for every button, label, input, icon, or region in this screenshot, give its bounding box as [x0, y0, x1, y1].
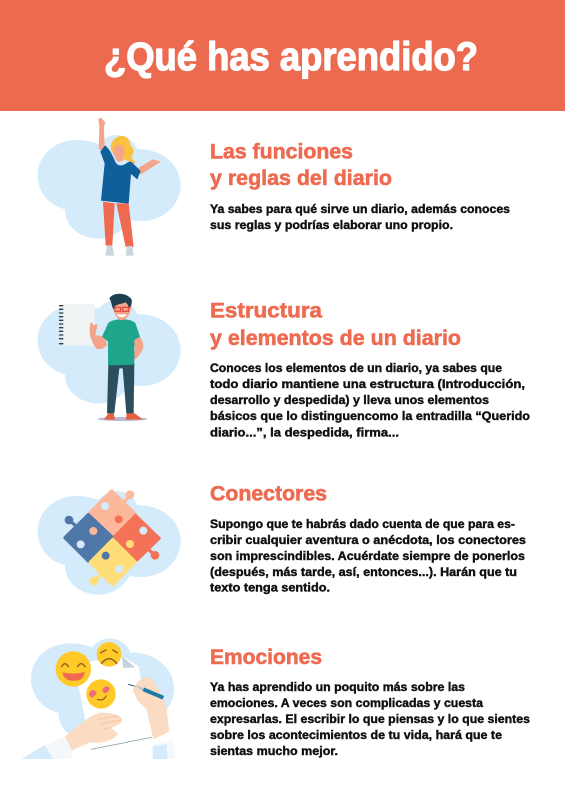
body text: son imprescindibles. Acuérdate siempre de ponerlos	[210, 549, 525, 563]
body text: todo diario mantiene una estructura (Introducción,	[210, 377, 525, 391]
body text: texto tenga sentido.	[210, 580, 330, 594]
body text: básicos que lo distinguencomo la entradilla “Querido	[210, 409, 530, 423]
body text: desarrollo y despedida) y lleva unos elementos	[210, 393, 489, 407]
title: ¿Qué has aprendido?	[104, 35, 478, 79]
body text: sobre los acontecimientos de tu vida, hará que te	[210, 728, 502, 742]
body text: cribir cualquier aventura o anécdota, los conectores	[210, 533, 526, 547]
body text: expresarlas. El escribir lo que piensas y lo que sientes	[210, 712, 530, 726]
illustration: woman waving on cloud	[38, 117, 181, 256]
illustration: hands writing with emojis on cloud	[22, 638, 176, 759]
panel: emociones	[22, 638, 530, 759]
body text: (después, más tarde, así, entonces...). Harán que tu	[210, 565, 517, 579]
body text: Conoces los elementos de un diario, ya sabes que	[210, 361, 502, 375]
body text: emociones. A veces son complicadas y cuesta	[210, 696, 483, 710]
heading: y reglas del diario	[210, 166, 392, 190]
body text	[210, 202, 510, 232]
illustration: puzzle on cloud	[38, 490, 181, 595]
body text: diario...”, la despedida, firma...	[210, 426, 399, 440]
body text	[210, 361, 530, 440]
heading: y elementos de un diario	[210, 326, 461, 350]
header banner	[0, 0, 565, 111]
panel: funciones	[38, 117, 510, 256]
heading: Conectores	[210, 482, 327, 506]
panel: estructura	[38, 294, 530, 440]
body text: Ya has aprendido un poquito más sobre las	[210, 680, 465, 694]
body text: sus reglas y podrías elaborar uno propio.	[210, 218, 453, 232]
heading: Las funciones	[210, 140, 353, 164]
body text: sientas mucho mejor.	[210, 744, 338, 758]
body text: Supongo que te habrás dado cuenta de que para es-	[210, 517, 515, 531]
body text	[210, 517, 526, 594]
panel: conectores	[38, 482, 526, 595]
heading: Estructura	[210, 298, 323, 322]
body text	[210, 680, 530, 758]
heading: Emociones	[210, 645, 322, 669]
body text: Ya sabes para qué sirve un diario, además conoces	[210, 202, 510, 216]
illustration: man with notebook on cloud	[38, 294, 181, 421]
heading	[210, 140, 392, 190]
heading	[210, 298, 461, 350]
